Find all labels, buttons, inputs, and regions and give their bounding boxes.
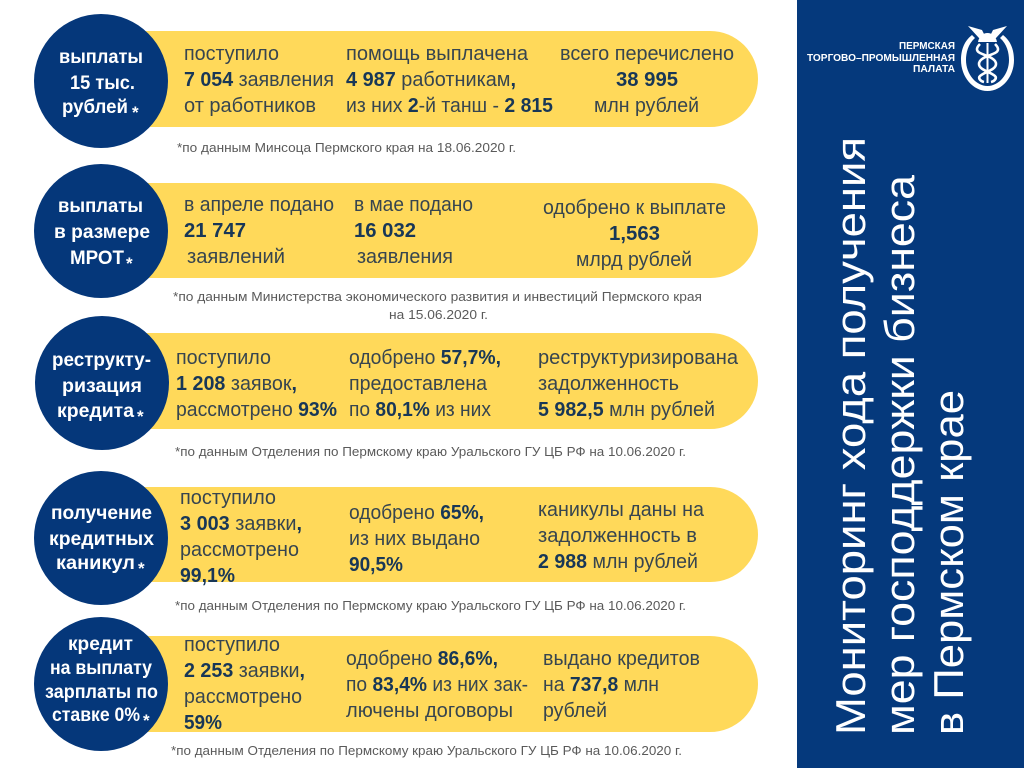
- applications received: [176, 347, 337, 421]
- footnote: row 2: [173, 289, 702, 322]
- applications in April: в апреле подано: [184, 194, 334, 216]
- yellow band: [101, 31, 758, 127]
- title: в Пермском крае: [925, 390, 972, 735]
- restructured debt: 5 982,5 млн рублей: [538, 399, 715, 421]
- approved: [346, 648, 528, 722]
- approved: предоставлена: [349, 373, 488, 395]
- row: minimum wage payments: [34, 164, 758, 298]
- title: мер господдержки бизнеса: [876, 174, 923, 735]
- total transferred: млн рублей: [594, 95, 699, 117]
- applications received: 59%: [184, 712, 222, 734]
- applications received: рассмотрено: [180, 539, 299, 561]
- approved for payment: млрд рублей: [576, 249, 692, 271]
- applications received: 1 208 заявок,: [176, 373, 297, 395]
- holidays granted: каникулы даны на: [538, 499, 705, 521]
- footnote: row 5: *по данным Отделения по Пермскому краю Уральского ГУ ЦБ РФ на 10.06.2020 г.: [171, 743, 682, 758]
- applications in April: 21 747: [184, 220, 246, 242]
- yellow band: [101, 183, 758, 278]
- circle label: кредит: [68, 634, 133, 655]
- applications received: поступило: [180, 487, 276, 509]
- circle label: зарплаты по: [45, 682, 158, 703]
- approved for payment: [543, 197, 726, 271]
- credits issued: рублей: [543, 700, 607, 722]
- restructured debt: реструктуризирована: [538, 347, 739, 369]
- row: credit restructuring: [35, 316, 758, 450]
- yellow band: [101, 636, 758, 732]
- footnote: row 2: на 15.06.2020 г.: [389, 307, 488, 322]
- circle label: *: [138, 559, 145, 578]
- applications received: рассмотрено: [184, 686, 302, 708]
- aid paid: из них 2-й танш - 2 815: [346, 95, 553, 117]
- approved: из них выдано: [349, 528, 480, 550]
- applications in May: [354, 194, 473, 268]
- footnote: row 1: *по данным Минсоца Пермского края на 18.06.2020 г.: [177, 140, 516, 155]
- circle label: *: [126, 254, 133, 273]
- circle label: МРОТ: [70, 248, 124, 269]
- approved: по 80,1% из них: [349, 399, 491, 421]
- circle label: выплаты: [58, 196, 143, 217]
- logo: Perm Chamber of Commerce: [807, 26, 1014, 91]
- circle label: получение: [51, 503, 152, 524]
- approved: одобрено 65%,: [349, 502, 484, 524]
- applications received: [184, 634, 305, 734]
- circle label: *: [132, 103, 139, 122]
- row: payments of 15 thousand roubles: [34, 14, 758, 148]
- total transferred: 38 995: [616, 69, 678, 91]
- applications received: [184, 43, 334, 117]
- applications in May: 16 032: [354, 220, 416, 242]
- circle label: ставке 0%: [52, 705, 140, 726]
- aid paid: 4 987 работникам,: [346, 69, 516, 91]
- total transferred: [560, 43, 734, 117]
- approved: по 83,4% из них зак-: [346, 674, 528, 696]
- yellow band: [101, 487, 758, 582]
- circle label: на выплату: [50, 658, 152, 679]
- applications received: 7 054 заявления: [184, 69, 334, 91]
- holidays granted: задолженность в: [538, 525, 697, 547]
- circle label: [34, 471, 168, 605]
- circle label: *: [137, 407, 144, 426]
- logo name: ТОРГОВО–ПРОМЫШЛЕННАЯ: [807, 53, 955, 64]
- credits issued: на 737,8 млн: [543, 674, 659, 696]
- circle label: кредита: [57, 401, 134, 422]
- circle label: [35, 316, 169, 450]
- circle label: *: [143, 711, 150, 730]
- circle label: в размере: [54, 222, 150, 243]
- applications received: от работников: [184, 95, 316, 117]
- row: wage credit at zero rate: [34, 617, 758, 751]
- approved: лючены договоры: [346, 700, 513, 722]
- footnote: row 4: *по данным Отделения по Пермскому краю Уральского ГУ ЦБ РФ на 10.06.2020 г.: [175, 598, 686, 613]
- applications received: [180, 487, 302, 587]
- credits issued: выдано кредитов: [543, 648, 700, 670]
- restructured debt: [538, 347, 739, 421]
- panel: title sidebar: [797, 0, 1024, 768]
- logo name: [807, 41, 955, 75]
- circle label: [34, 617, 168, 751]
- applications in May: в мае подано: [354, 194, 473, 216]
- circle label: реструкту-: [52, 350, 151, 371]
- applications in May: заявления: [357, 246, 453, 268]
- approved for payment: 1,563: [609, 223, 660, 245]
- circle label: рублей: [62, 97, 128, 118]
- applications received: поступило: [184, 634, 280, 656]
- approved: [349, 347, 501, 421]
- approved: одобрено 86,6%,: [346, 648, 498, 670]
- applications received: рассмотрено 93%: [176, 399, 337, 421]
- footnote: row 3: *по данным Отделения по Пермскому краю Уральского ГУ ЦБ РФ на 10.06.2020 г.: [175, 444, 686, 459]
- holidays granted: [538, 499, 705, 573]
- applications received: поступило: [184, 43, 279, 65]
- title: [827, 137, 972, 735]
- applications received: 3 003 заявки,: [180, 513, 302, 535]
- row: credit holidays: [34, 471, 758, 605]
- circle label: выплаты: [59, 47, 143, 68]
- footnote: row 2: *по данным Министерства экономического развития и инвестиций Пермского края: [173, 289, 702, 304]
- yellow band: [102, 333, 758, 429]
- approved: 90,5%: [349, 554, 403, 576]
- circle label: [34, 14, 168, 148]
- approved: [349, 502, 484, 576]
- circle label: каникул: [56, 553, 135, 574]
- applications received: 99,1%: [180, 565, 235, 587]
- approved: одобрено 57,7%,: [349, 347, 501, 369]
- circle label: 15 тыс.: [70, 73, 135, 94]
- total transferred: всего перечислено: [560, 43, 734, 65]
- restructured debt: задолженность: [538, 373, 679, 395]
- applications received: 2 253 заявки,: [184, 660, 305, 682]
- credits issued: [543, 648, 700, 722]
- applications received: поступило: [176, 347, 271, 369]
- applications in April: заявлений: [187, 246, 285, 268]
- aid paid: помощь выплачена: [346, 43, 529, 65]
- approved for payment: одобрено к выплате: [543, 197, 726, 219]
- circle label: ризация: [62, 376, 142, 397]
- circle label: кредитных: [49, 529, 154, 550]
- holidays granted: 2 988 млн рублей: [538, 551, 698, 573]
- aid paid: [346, 43, 553, 117]
- applications in April: [184, 194, 334, 268]
- circle label: [34, 164, 168, 298]
- logo name: ПЕРМСКАЯ: [899, 41, 955, 52]
- logo emblem: [961, 26, 1014, 91]
- logo name: ПАЛАТА: [913, 64, 955, 75]
- title: Мониторинг хода получения: [827, 137, 874, 735]
